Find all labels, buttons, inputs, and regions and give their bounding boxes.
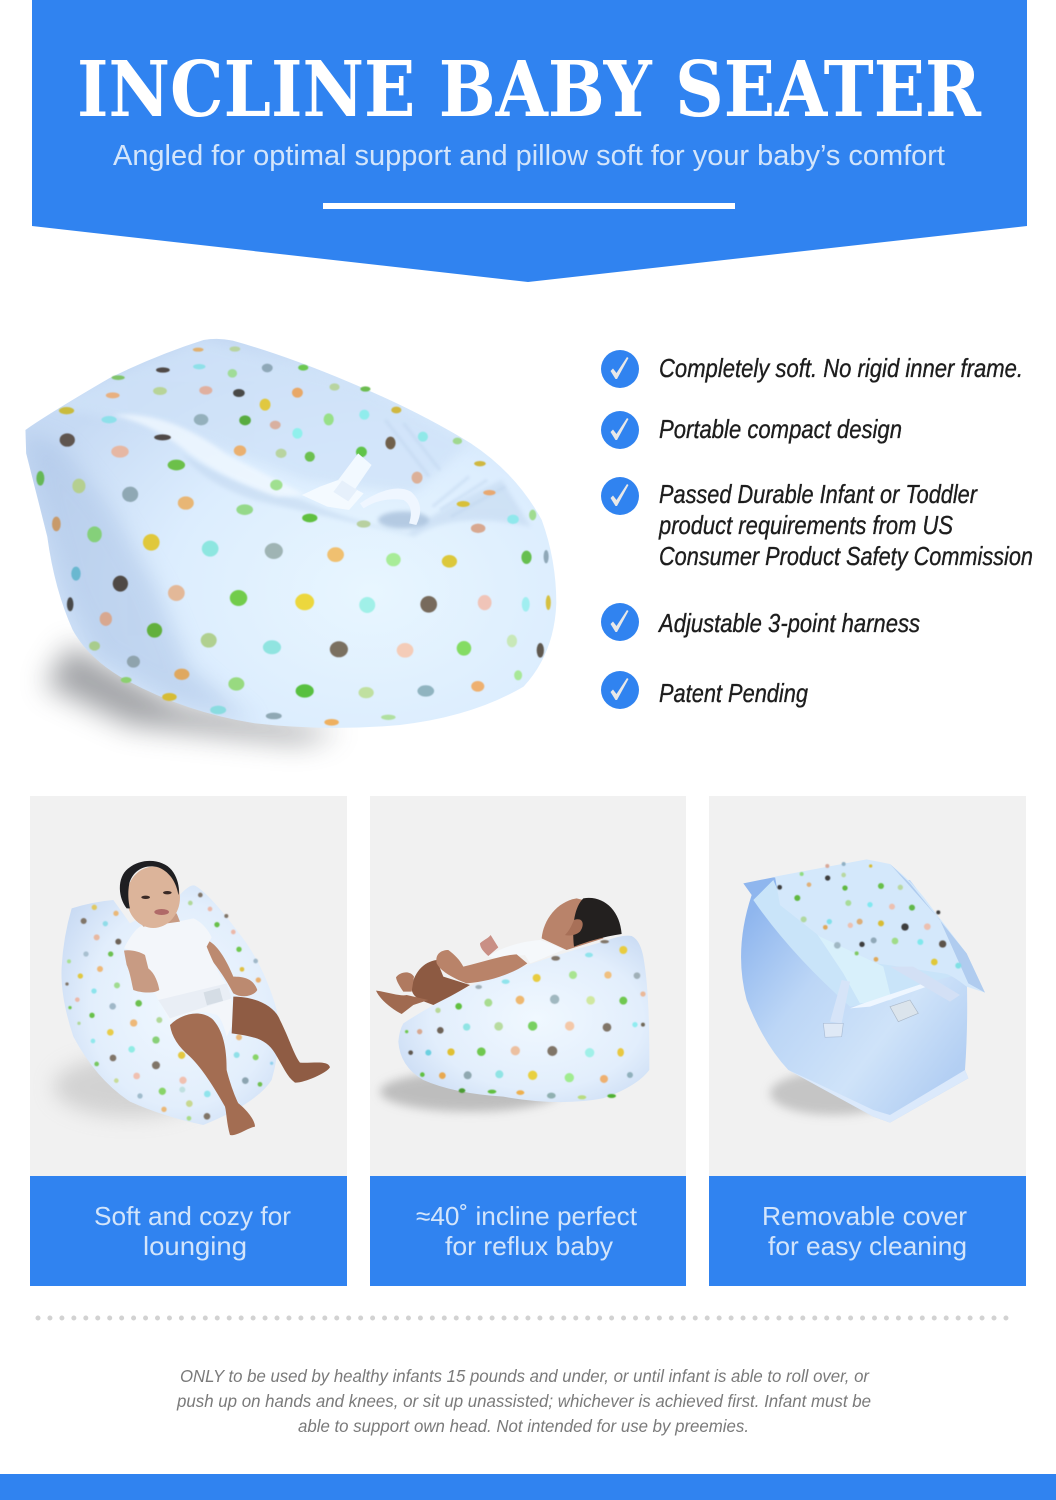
header banner (32, 0, 1027, 282)
caption: Removable cover (762, 1201, 967, 1231)
feature 4 (601, 603, 920, 641)
caption: for reflux baby (445, 1231, 613, 1261)
caption (30, 1176, 347, 1286)
feature 1 (601, 350, 1023, 388)
harness straps and buckle (302, 453, 429, 529)
photo: inner cushion with cover pulled back (741, 859, 985, 1123)
panel: reflux incline (370, 796, 686, 1286)
safety notice: push up on hands and knees, or sit up unassisted; whichever is achieved first. Infant must be (176, 1391, 871, 1411)
caption (370, 1176, 686, 1286)
safety notice (176, 1366, 871, 1436)
straps and buckles (823, 967, 960, 1037)
caption: ≈40˚ incline perfect (416, 1201, 638, 1231)
caption: lounging (143, 1231, 247, 1261)
seat shadow (45, 645, 340, 742)
baby (120, 861, 330, 1135)
feature 5: Patent Pending (659, 678, 808, 708)
seat body (22, 339, 556, 728)
feature 5 (601, 671, 808, 709)
panel: lounging (30, 796, 347, 1286)
photo: baby lounging on seat (53, 861, 330, 1135)
caption: for easy cleaning (768, 1231, 967, 1261)
feature 3 (601, 477, 1033, 571)
feature list (601, 350, 1033, 709)
baby (376, 898, 622, 1014)
safety notice: ONLY to be used by healthy infants 15 pounds and under, or until infant is able to roll over, or (180, 1366, 870, 1386)
feature 3: product requirements from US (658, 510, 954, 540)
caption (709, 1176, 1026, 1286)
fabric dots (36, 346, 551, 726)
feature 2 (601, 411, 902, 449)
feature 3: Passed Durable Infant or Toddler (659, 479, 978, 509)
footer bar (0, 1474, 1056, 1500)
panel: removable cover (709, 796, 1026, 1286)
feature 4: Adjustable 3-point harness (657, 608, 920, 638)
caption: Soft and cozy for (94, 1201, 291, 1231)
cover with dots (775, 859, 985, 993)
photo: baby side view on seat (376, 898, 649, 1112)
feature 2: Portable compact design (659, 414, 902, 444)
subtitle: Angled for optimal support and pillow soft for your baby’s comfort (113, 140, 945, 172)
product photo: polka-dot seat (22, 339, 556, 742)
header rule (323, 203, 735, 209)
safety notice: able to support own head. Not intended for use by preemies. (298, 1416, 749, 1436)
